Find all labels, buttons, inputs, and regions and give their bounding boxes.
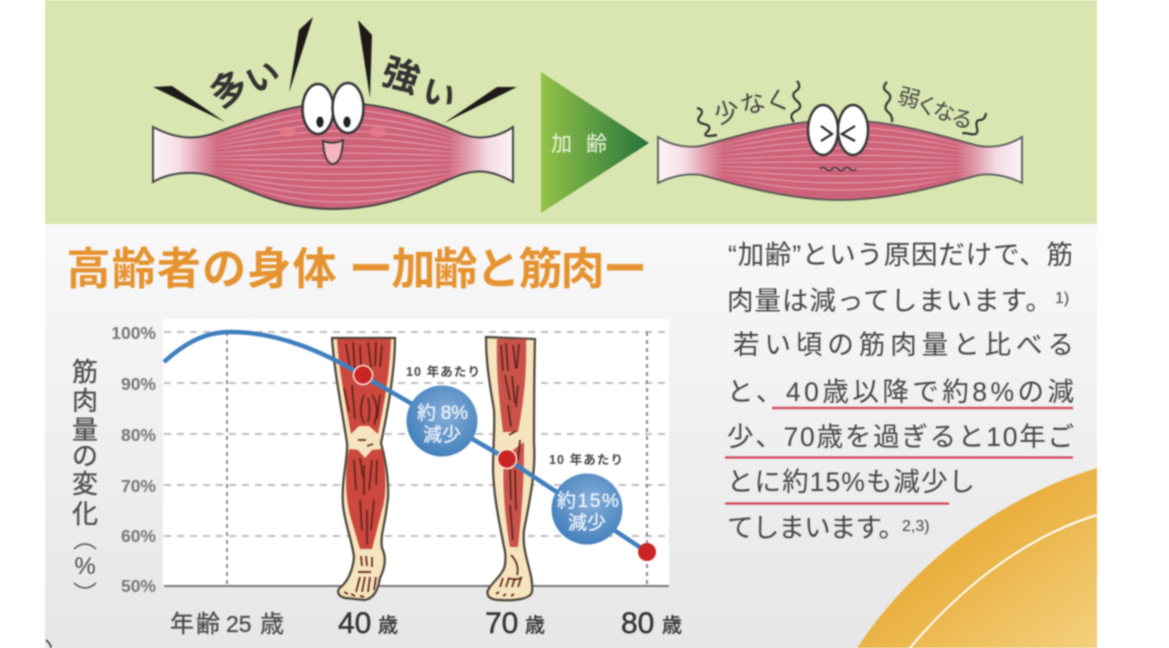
body text: てしまいます。	[727, 513, 905, 543]
y axis labels	[111, 323, 156, 596]
title	[66, 245, 647, 294]
aging arrow: 加	[551, 133, 572, 156]
x axis labels: 25	[226, 611, 252, 637]
note: per decade 1: 10 年あたり	[406, 364, 480, 379]
leg: age 70	[486, 337, 535, 600]
y axis labels: 80%	[121, 425, 156, 445]
mouth	[323, 140, 343, 164]
y axis labels: 90%	[121, 374, 156, 394]
background panel	[45, 224, 1097, 648]
line chart: 歳	[378, 614, 398, 637]
label: 少なく	[711, 85, 794, 130]
title: ー加齢と筋肉ー	[349, 245, 647, 294]
eyes	[808, 105, 868, 155]
plot area	[163, 319, 669, 587]
data point: 80	[638, 543, 656, 561]
x axis labels	[170, 611, 284, 638]
bubble: 15%	[552, 474, 622, 544]
data point: 40	[354, 366, 372, 384]
wavy mouth	[820, 168, 856, 170]
body text: 肉量は減ってしまいます。	[727, 286, 1052, 316]
label: 少なく: く	[762, 85, 794, 119]
eyes	[302, 83, 364, 134]
line chart: 歳	[662, 614, 682, 637]
cheeks	[280, 127, 386, 137]
y axis labels: 50%	[121, 576, 156, 596]
data point: 70	[498, 450, 516, 468]
leg: age 40	[332, 338, 395, 600]
label: 弱くなる	[895, 83, 976, 134]
corner mark	[46, 640, 51, 648]
bubble: 8%: 約 8%	[417, 402, 468, 424]
strong muscle character: い	[240, 53, 286, 101]
body text	[727, 240, 1074, 543]
label: 弱くなる: く	[913, 91, 941, 121]
bubble: 15%: 約15%	[557, 490, 619, 512]
bubble: 15%: 減少	[568, 512, 606, 534]
label: 弱くなる: 弱	[895, 83, 923, 113]
squiggles	[697, 81, 986, 136]
y axis labels: 60%	[121, 526, 156, 546]
line chart: 歳	[525, 614, 545, 637]
body text: とに約15%も減少し	[727, 467, 975, 497]
y axis title: 筋肉量の変化	[72, 357, 98, 529]
title: 高齢者の身体	[66, 245, 336, 294]
strong muscle character	[153, 17, 517, 209]
body text: 1)	[1055, 290, 1069, 307]
body text: 少、70歳を過ぎると10年ご	[727, 422, 1074, 452]
muscle body	[153, 103, 513, 209]
label: 少なく: 少	[711, 96, 743, 130]
x axis labels: 年齢	[170, 611, 220, 638]
line chart: 70	[485, 607, 518, 640]
red underlines	[725, 408, 1073, 504]
body text: 2,3)	[902, 518, 930, 535]
x axis labels: 歳	[260, 611, 284, 638]
aging arrow	[541, 72, 649, 213]
y axis labels: 70%	[121, 476, 156, 496]
bubble: 8%	[406, 386, 478, 456]
label: 多い: 多	[204, 64, 254, 116]
bubble: 8%: 減少	[423, 424, 461, 446]
body text: と、40歳以降で約8%の減	[727, 377, 1074, 407]
label: 弱くなる: な	[930, 97, 958, 127]
strong muscle character: い	[418, 71, 460, 117]
body text: “加齢”という原因だけで、筋	[728, 240, 1073, 270]
line chart: 40	[338, 607, 371, 640]
body text: 若い頃の筋肉量と比べる	[733, 330, 1074, 360]
label: 弱くなる: る	[948, 104, 976, 134]
emphasis spikes	[153, 17, 517, 123]
aging arrow: 齢	[586, 133, 607, 156]
label: 少なく: な	[737, 87, 769, 121]
note: per decade 2: 10 年あたり	[549, 452, 623, 467]
y axis labels: 100%	[111, 323, 156, 343]
y axis title: %	[74, 553, 96, 580]
label: 強い: 強	[377, 51, 425, 101]
trend line	[164, 332, 647, 552]
line chart	[72, 319, 682, 640]
gold corner arc	[857, 468, 1097, 648]
weak muscle character	[658, 81, 1022, 200]
green top band	[45, 0, 1097, 224]
muscle body	[658, 120, 1022, 200]
line chart: 80	[621, 607, 654, 640]
